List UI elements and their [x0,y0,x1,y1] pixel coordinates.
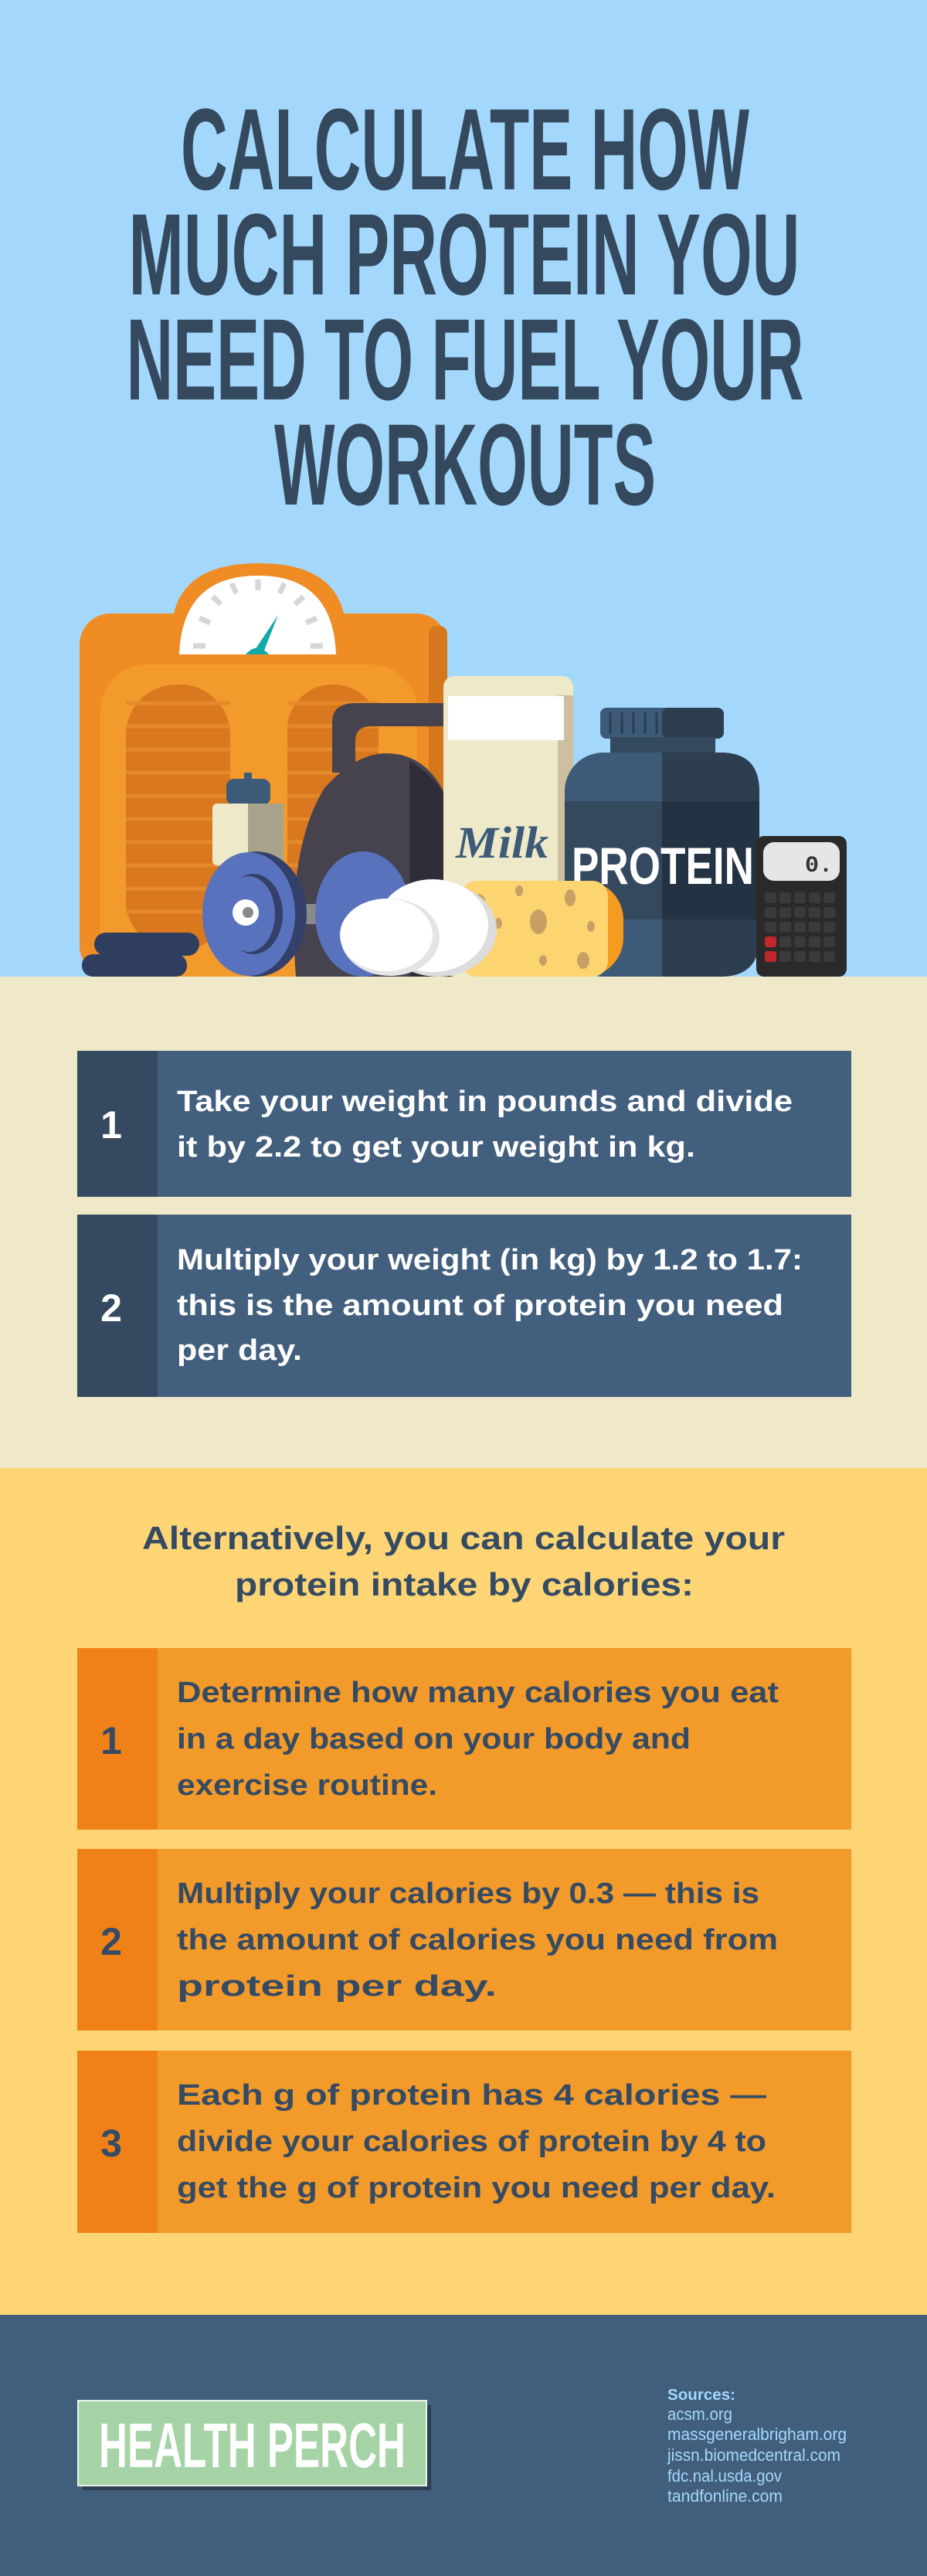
step 1 (blue): Take your weight in pounds and divide [177,1086,793,1118]
sources: massgeneralbrigham.org [667,2425,847,2444]
icon: milk carton [443,676,573,977]
icon: water bottle [212,773,284,865]
icon: protein jar: PROTEIN [572,837,754,895]
step 3 (orange) [77,2051,851,2233]
step 1 (blue): 1 [100,1103,122,1147]
icon: protein jar [565,708,759,977]
step 2 (orange) [77,1849,851,2031]
step 3 (orange): get the g of protein you need per day. [177,2172,776,2204]
step 2 (orange): Multiply your calories by 0.3 — this is [177,1878,759,1910]
heading: alternative method: Alternatively, you can calculate your [142,1520,785,1556]
icon: calculator [756,836,847,977]
sources: Sources: [667,2387,735,2404]
panel: calorie method steps [77,1648,851,2233]
sources: acsm.org [667,2404,732,2424]
panel: weight method steps [77,1051,851,1397]
step 2 (blue): this is the amount of protein you need [177,1290,783,1322]
heading: alternative method: protein intake by calories: [235,1566,694,1602]
step 1 (blue): it by 2.2 to get your weight in kg. [177,1131,695,1164]
step 3 (orange): 3 [100,2122,122,2165]
step 2 (blue): Multiply your weight (in kg) by 1.2 to 1.7: [177,1244,803,1276]
icon: cheese [461,881,623,977]
step 2 (blue): per day. [177,1334,302,1367]
step 2 (orange): 2 [100,1920,122,1963]
icon: calculator: 0. [805,853,833,879]
step 2 (orange): protein per day. [177,1970,497,2003]
step 1 (blue) [77,1051,851,1197]
logo: Health Perch: HEALTH PERCH [99,2411,406,2481]
sources: fdc.nal.usda.gov [667,2466,782,2486]
sources [667,2387,847,2506]
step 1 (orange): Determine how many calories you eat [177,1677,779,1709]
icon: bathroom scale [80,563,447,977]
illustration: fitness and food items [80,563,847,977]
step 1 (orange): in a day based on your body and [177,1723,691,1755]
icon: eggs [340,879,497,977]
logo: Health Perch [78,2401,431,2490]
icon: dumbbell [202,851,411,977]
step 1 (orange): 1 [100,1719,122,1762]
step 2 (blue) [77,1215,851,1397]
title [127,84,803,529]
sources: tandfonline.com [667,2486,783,2506]
sources: jissn.biomedcentral.com [667,2445,840,2465]
icon: milk carton: Milk [455,817,548,868]
icon: weight plates [82,933,199,977]
step 2 (blue): 2 [100,1286,122,1330]
step 3 (orange): divide your calories of protein by 4 to [177,2126,766,2158]
heading: alternative method [142,1520,785,1602]
step 1 (orange): exercise routine. [177,1769,437,1802]
icon: kettlebell [294,703,460,977]
step 2 (orange): the amount of calories you need from [177,1924,778,1956]
step 1 (orange) [77,1648,851,1830]
step 3 (orange): Each g of protein has 4 calories — [177,2079,766,2112]
